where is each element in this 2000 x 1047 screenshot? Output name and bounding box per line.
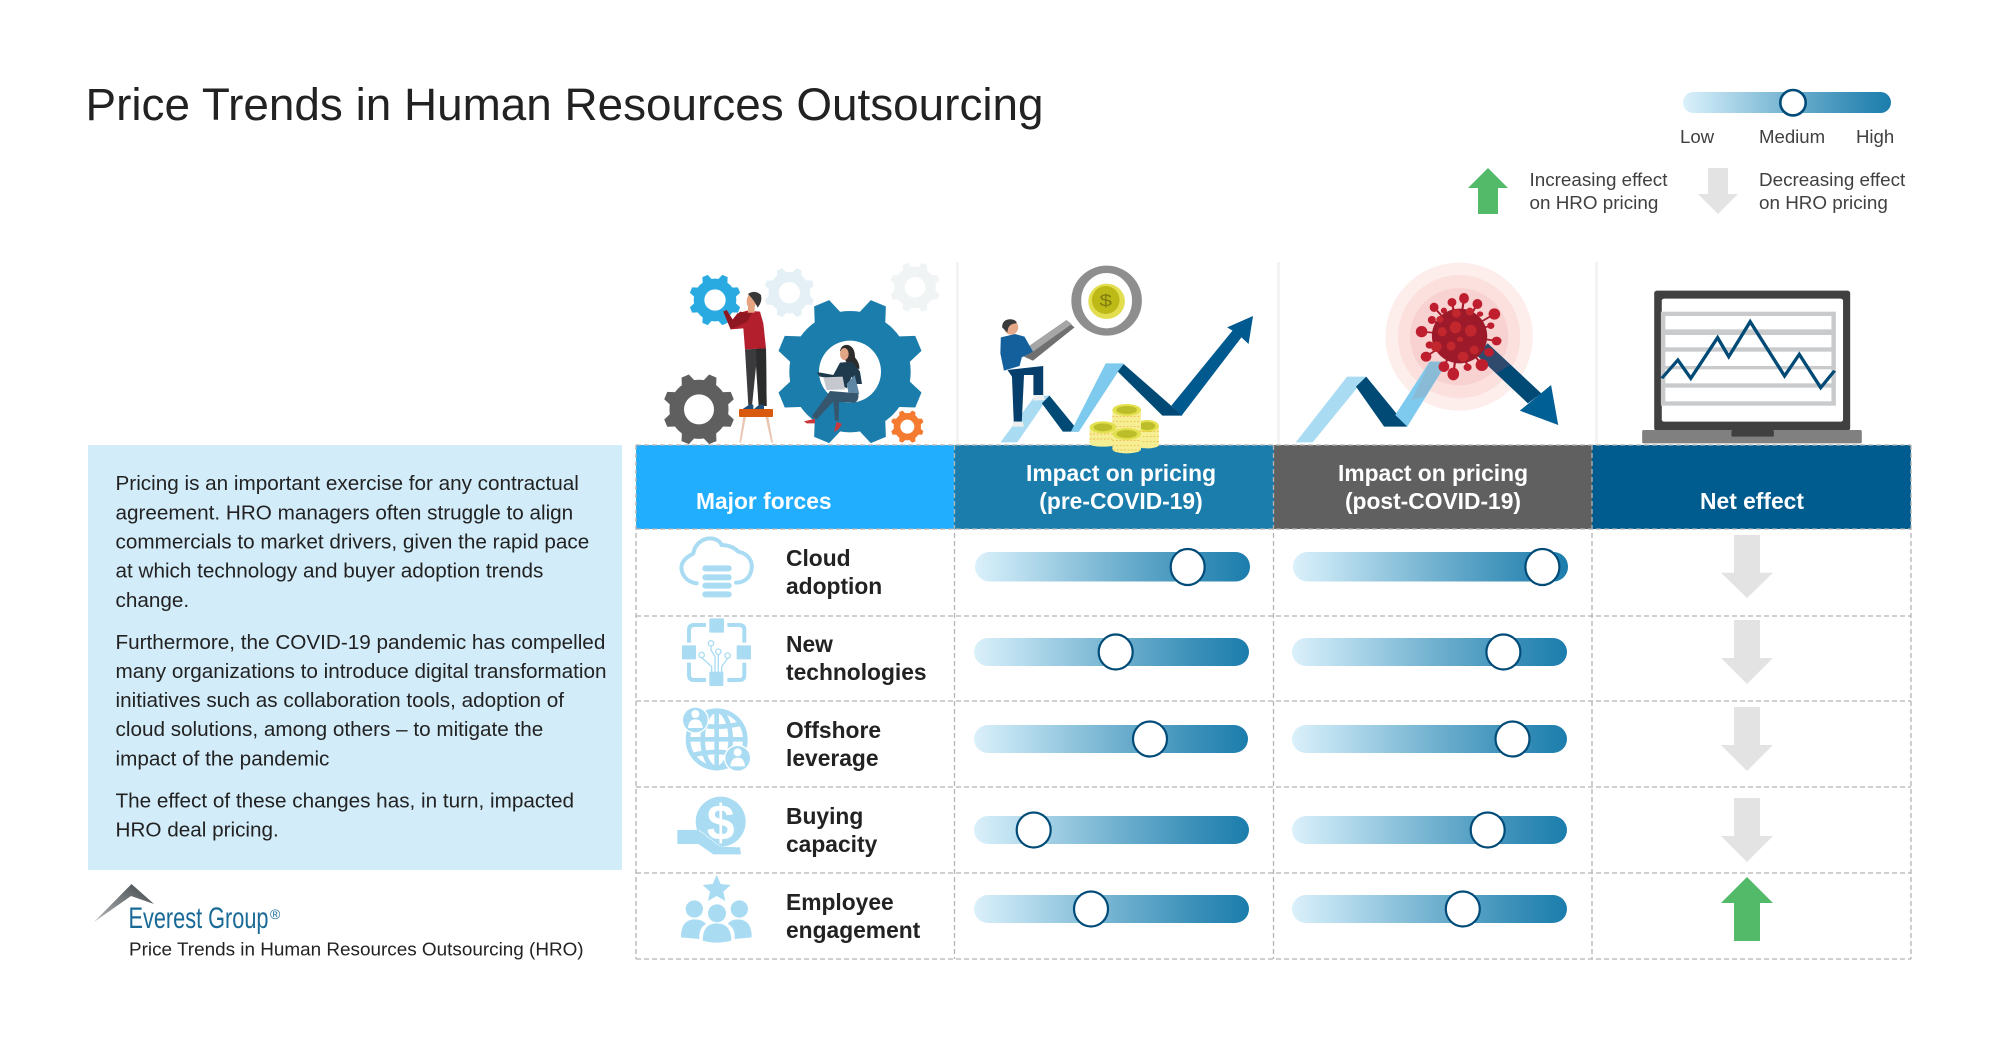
label: buying capacity: Buying [786, 803, 863, 829]
blue gear [689, 274, 741, 326]
table header: post-COVID impact [1274, 445, 1592, 529]
falling trend line [1296, 343, 1558, 442]
chart grid [1661, 312, 1836, 406]
label: employee engagement: engagement [786, 917, 921, 943]
label: cloud adoption: Cloud [786, 545, 851, 571]
table header: pre-COVID impact: (pre-COVID-19) [1039, 488, 1203, 514]
row: employee engagement [681, 875, 1773, 943]
table header: net effect [1592, 445, 1911, 529]
faded grey gear [890, 262, 940, 313]
table header: post-COVID impact: Impact on pricing [1338, 460, 1528, 486]
row: new technologies [682, 618, 1773, 686]
legend increasing arrow [1468, 168, 1508, 214]
virus [1416, 293, 1502, 380]
legend scale labels [1680, 126, 1894, 147]
row: buying capacity [676, 795, 1773, 862]
intro paragraph 2: many organizations to introduce digital transformation [116, 660, 607, 683]
logo wordmark: Everest Group [128, 902, 268, 935]
logo: Everest Group [94, 884, 281, 935]
row: cloud adoption [681, 535, 1773, 599]
laptop screen [1654, 291, 1850, 431]
grey gear [663, 373, 735, 445]
slider: offshore post-COVID [1292, 722, 1567, 756]
logo registered mark: ® [270, 906, 281, 922]
title: Price Trends in Human Resources Outsourcing [86, 78, 1044, 130]
intro paragraph 2: impact of the pandemic [116, 748, 329, 771]
coin stack right [1136, 420, 1159, 448]
logo mountain [94, 884, 154, 922]
man climbing [1000, 319, 1045, 427]
slider: cloud pre-COVID [975, 549, 1250, 585]
virus halo [1385, 263, 1533, 411]
illustration: gears and workers [663, 262, 940, 446]
orange gear [891, 410, 924, 443]
intro paragraph 1: change. [116, 589, 189, 612]
icon: hand with dollar: $ [707, 795, 735, 851]
faded blue gear [764, 267, 815, 318]
table header: net effect: Net effect [1700, 488, 1804, 514]
label: offshore leverage: leverage [786, 745, 879, 771]
table header: pre-COVID impact [954, 445, 1274, 529]
row: offshore leverage [682, 706, 1773, 772]
table header: post-COVID impact: (post-COVID-19) [1345, 488, 1521, 514]
table header: major forces [636, 445, 954, 529]
large gear [776, 298, 924, 446]
intro paragraph 2: cloud solutions, among others – to mitigate the [116, 718, 543, 741]
intro paragraph 1: commercials to market drivers, given the rapid pace [116, 530, 589, 553]
legend decreasing arrow [1698, 168, 1738, 214]
chart line [1662, 322, 1835, 388]
slider: buying post-COVID [1292, 812, 1567, 848]
intro paragraph 2: initiatives such as collaboration tools, adoption of [116, 689, 564, 712]
slider: cloud post-COVID [1293, 549, 1568, 585]
intro paragraph 1: at which technology and buyer adoption trends [116, 560, 543, 583]
stool [739, 409, 773, 443]
icon: globe with people [682, 706, 751, 772]
coin stack left [1090, 421, 1116, 447]
footer source: Price Trends in Human Resources Outsourcing (HRO) [129, 940, 584, 961]
label: cloud adoption: adoption [786, 573, 882, 599]
slider: technologies pre-COVID [974, 634, 1249, 670]
icon: cloud [681, 538, 752, 597]
coin stacks overlapping header [1090, 404, 1159, 453]
intro paragraph 2: Furthermore, the COVID-19 pandemic has compelled [116, 631, 605, 654]
illustration: virus causing decline [1296, 263, 1558, 442]
laptop display [1662, 299, 1843, 422]
slider: technologies post-COVID [1292, 634, 1567, 670]
arrow: technologies net down [1721, 620, 1773, 684]
arrow: buying net down [1721, 798, 1773, 862]
intro paragraph 1: agreement. HRO managers often struggle to align [116, 501, 573, 524]
magnifying glass: $ [1100, 292, 1112, 310]
arrow: offshore net down [1721, 707, 1773, 771]
laptop base [1642, 430, 1862, 443]
illustration: laptop with chart [1642, 291, 1862, 443]
legend scale labels: Medium [1759, 126, 1825, 147]
legend scale labels: Low [1680, 126, 1715, 147]
label: new technologies: New [786, 631, 833, 657]
legend decreasing label: on HRO pricing [1759, 192, 1888, 213]
legend slider [1683, 90, 1891, 115]
arrow: employee net up [1721, 877, 1773, 941]
coin stack top [1112, 404, 1141, 430]
table header: pre-COVID impact: Impact on pricing [1026, 460, 1216, 486]
label: new technologies: technologies [786, 659, 927, 685]
icon: circuit [682, 618, 751, 686]
intro paragraph 3: The effect of these changes has, in turn, impacted [116, 789, 574, 812]
slider: employee pre-COVID [974, 892, 1249, 926]
slider: offshore pre-COVID [974, 722, 1248, 756]
slider: buying pre-COVID [974, 812, 1249, 848]
icon: team with star [681, 875, 752, 943]
label: buying capacity: capacity [786, 831, 878, 857]
laptop notch [1731, 430, 1774, 437]
icon: hand with dollar [676, 795, 746, 854]
illustration: rising price chart with magnifier [1000, 269, 1253, 442]
label: employee engagement: Employee [786, 889, 894, 915]
legend increasing label: Increasing effect [1530, 169, 1668, 190]
magnifying glass [1021, 269, 1137, 361]
legend decreasing label: Decreasing effect [1759, 169, 1906, 190]
man adjusting gear [723, 292, 767, 409]
slider: employee post-COVID [1292, 892, 1567, 926]
panel: intro text [88, 445, 622, 870]
rising trend line [1000, 316, 1253, 442]
woman with laptop [804, 345, 862, 432]
intro paragraph 3: HRO deal pricing. [116, 819, 279, 842]
arrow: cloud net down [1721, 535, 1773, 598]
table header: major forces: Major forces [696, 488, 832, 514]
legend scale labels: High [1856, 126, 1894, 147]
coin stack front [1112, 428, 1141, 453]
intro paragraph 1: Pricing is an important exercise for any contractual [116, 472, 579, 495]
legend [1468, 90, 1906, 214]
label: offshore leverage: Offshore [786, 717, 881, 743]
legend increasing label: on HRO pricing [1530, 192, 1658, 213]
